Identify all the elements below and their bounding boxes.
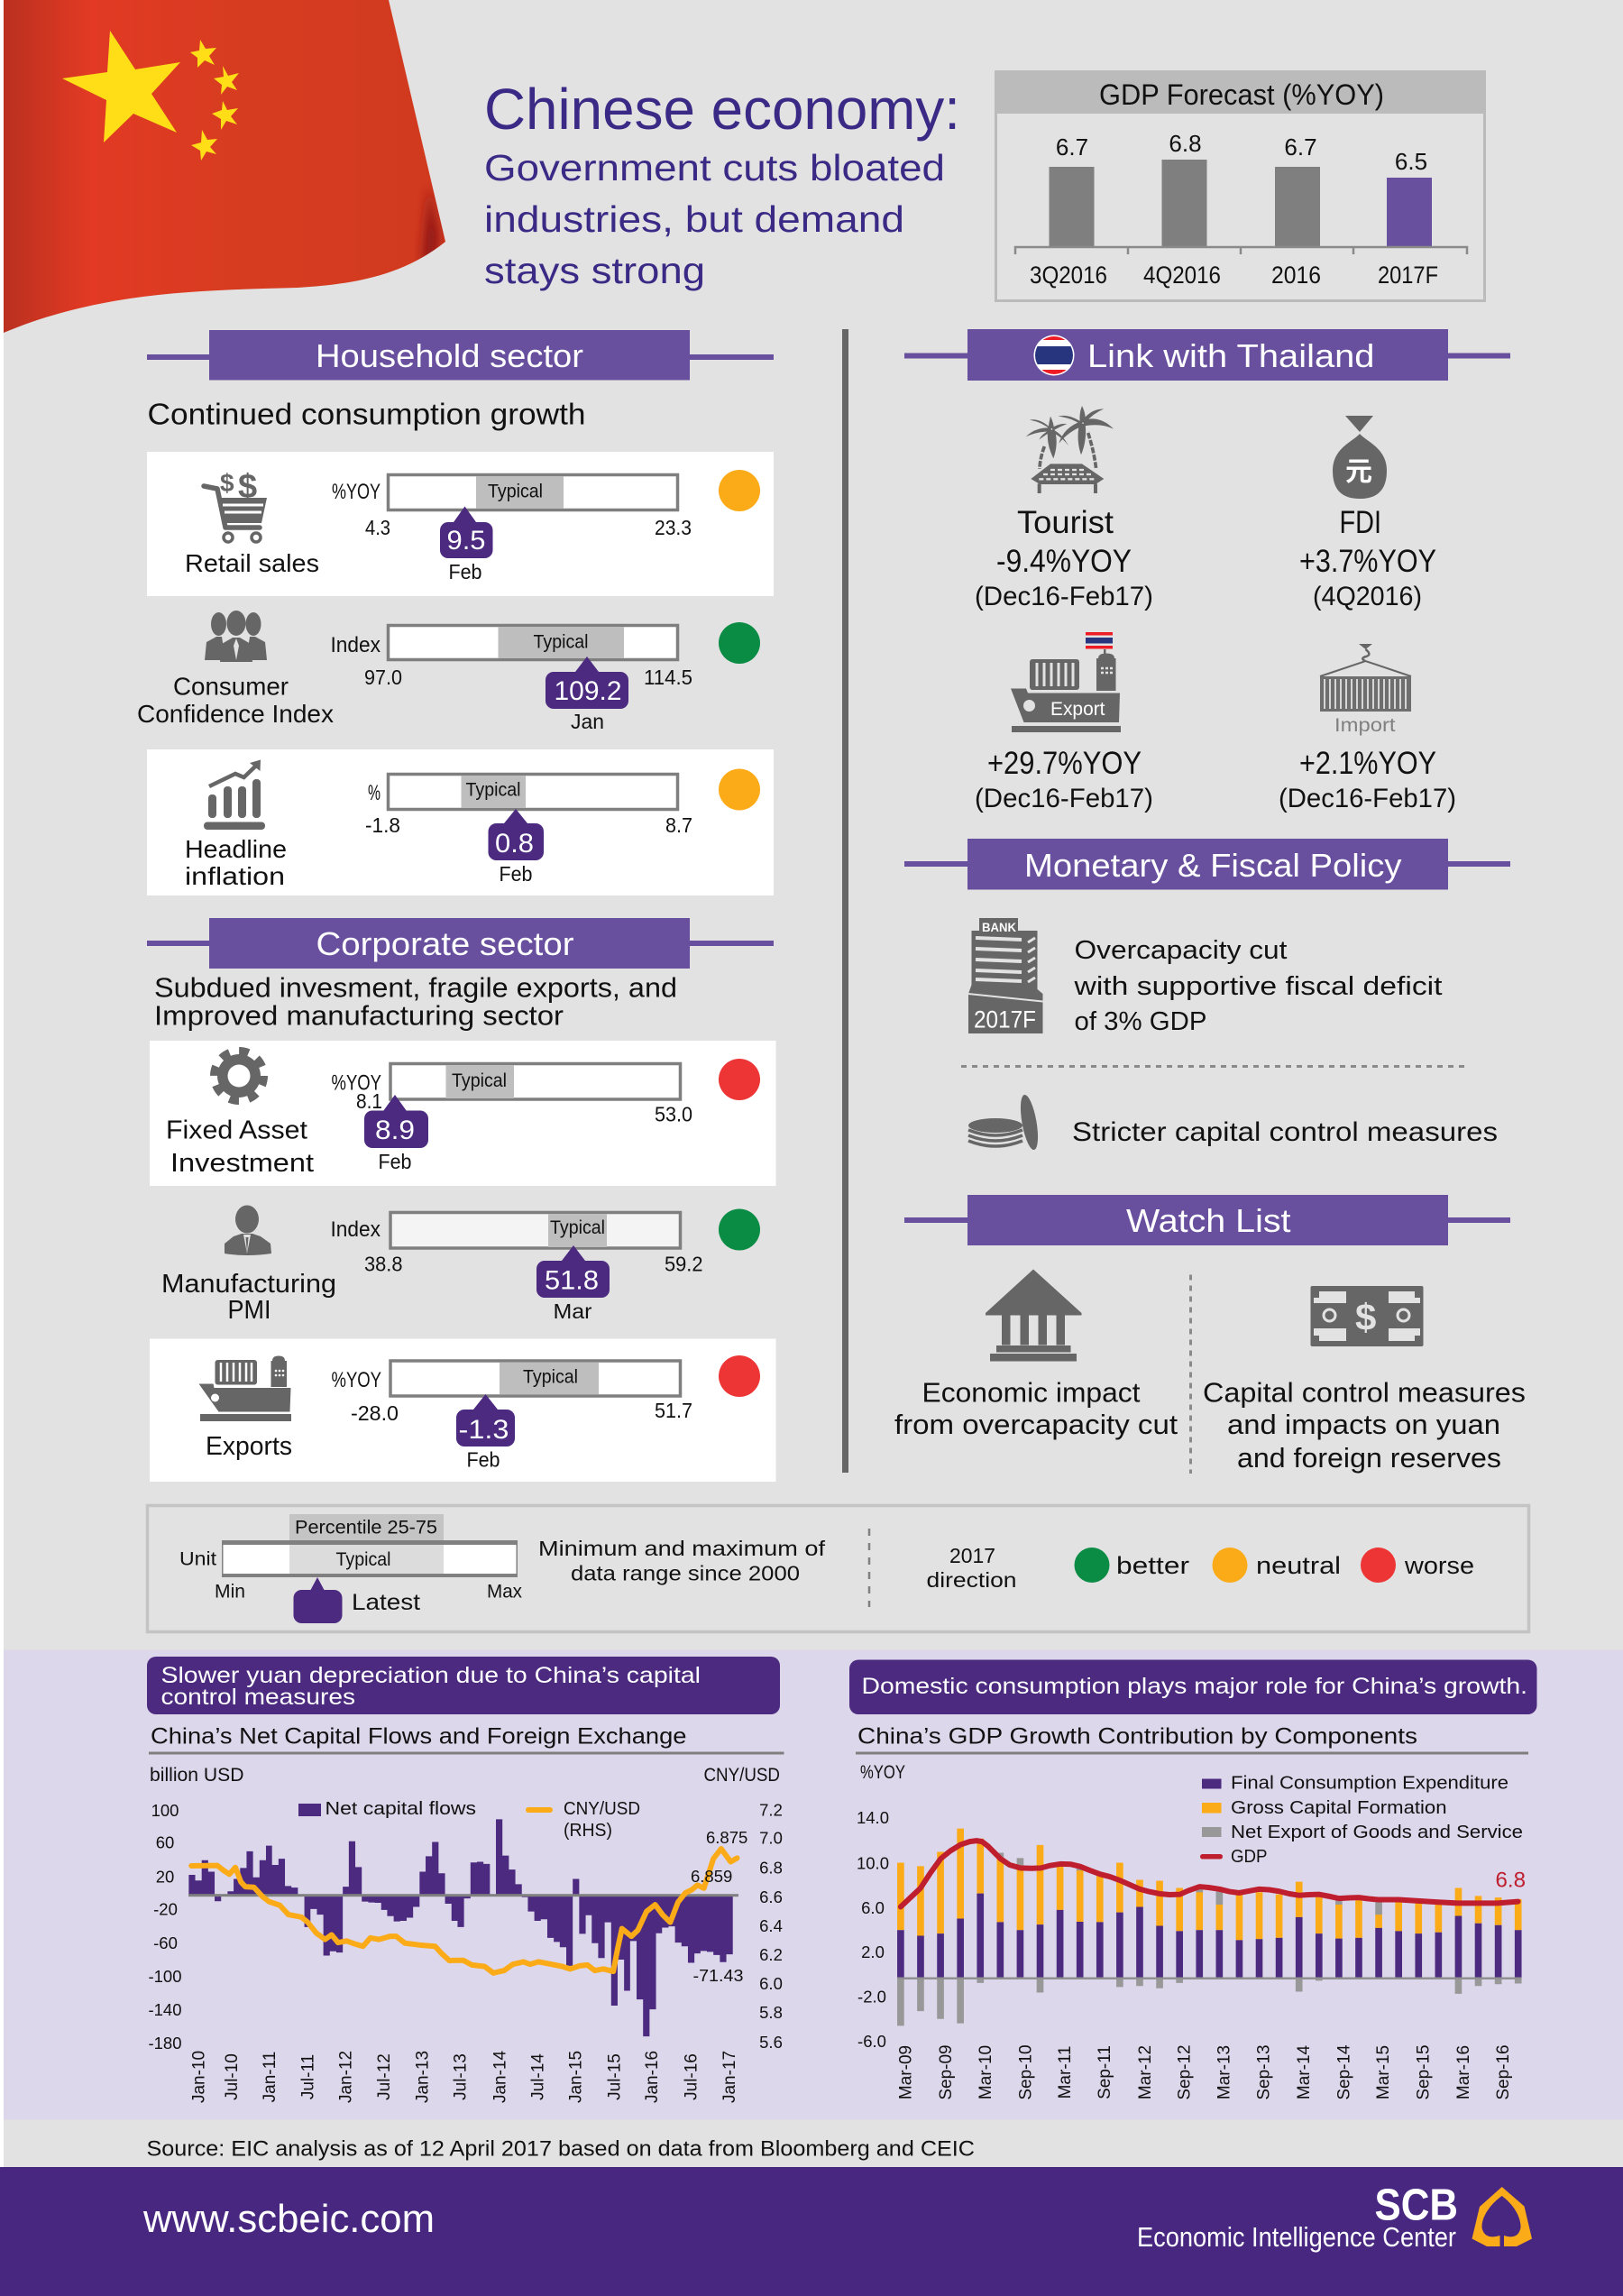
panel: fixed asset investment: Investment (170, 1149, 314, 1178)
latest value marker (536, 1245, 610, 1323)
heading: watch list (904, 1195, 1510, 1245)
x axis labels: Mar-11 (1056, 2046, 1075, 2099)
latest value marker: 109.2 (554, 676, 622, 706)
latest value marker: Feb (449, 560, 481, 583)
x axis labels (896, 2044, 1513, 2100)
latest value marker: -1.3 (458, 1415, 509, 1445)
icon: export ship with Thai flag (1011, 632, 1121, 732)
legend better (1075, 1548, 1189, 1583)
heading: link with Thailand: Link with Thailand (1087, 337, 1374, 374)
x axis labels: Mar-10 (977, 2045, 995, 2099)
subheading: corporate: Improved manufacturing sector (154, 999, 564, 1032)
icon: bank building: BANK (982, 920, 1016, 934)
label: Consumer (173, 673, 289, 700)
left axis: -20 (153, 1899, 178, 1919)
x axis labels: Jul-13 (451, 2053, 471, 2100)
legend: CNY/USD: CNY/USD (564, 1799, 640, 1819)
text: capital control impacts (1203, 1376, 1526, 1474)
left axis (148, 1801, 182, 2053)
legend marker (294, 1577, 420, 1623)
legend: capital flows: Net capital flows (325, 1799, 476, 1819)
x axis labels: Jan-11 (261, 2052, 280, 2102)
x axis labels: Sep-14 (1334, 2044, 1354, 2100)
text: economic impact: Economic impact (922, 1376, 1141, 1409)
range gauge: 23.3 (655, 516, 692, 539)
text: capital control impacts: Capital control measures (1203, 1376, 1526, 1409)
export text: +29.7%YOY (987, 746, 1142, 781)
latest value marker (489, 809, 544, 886)
chart heading: China’s Net Capital Flows and Foreign Exchange (151, 1724, 687, 1750)
chart value labels: 6.875 (706, 1828, 747, 1847)
legend better: better (1116, 1552, 1189, 1579)
heading: household sector: Household sector (316, 337, 583, 374)
latest value marker: 8.9 (375, 1116, 415, 1145)
subtitle: Government cuts bloated (484, 147, 945, 188)
import text: (Dec16-Feb17) (1279, 784, 1456, 813)
legend direction label (927, 1544, 1017, 1592)
right axis: 7.2 (759, 1800, 783, 1820)
chart value labels: -71.43 (692, 1966, 743, 1985)
status dot (719, 622, 760, 664)
latest value marker: 51.8 (545, 1266, 599, 1295)
panel: consumer confidence index: Confidence Index (137, 700, 334, 728)
y axis: -6.0 (857, 2032, 886, 2051)
x axis labels: Jul-15 (606, 2053, 624, 2100)
GDP bar chart: 2017F (1378, 262, 1438, 289)
heading: link with Thailand (904, 329, 1510, 381)
panel: headline inflation: inflation (185, 862, 285, 890)
latest value marker (364, 1095, 428, 1173)
x axis labels: Mar-09 (896, 2045, 916, 2099)
x axis labels: Jan-17 (720, 2051, 739, 2103)
x axis labels (189, 2051, 739, 2103)
text: overcapacity cut: with supportive fiscal deficit (1073, 972, 1443, 1001)
left axis: -140 (148, 2000, 182, 2019)
panel: capital flows chart (147, 1657, 784, 2103)
axis unit: %YOY (860, 1762, 905, 1783)
range gauge: Typical (465, 779, 521, 801)
FDI text: FDI (1340, 505, 1381, 540)
range gauge: 51.7 (655, 1399, 692, 1422)
range gauge: 38.8 (364, 1252, 402, 1275)
x axis labels: Jan-14 (491, 2051, 510, 2103)
range gauge: 4.3 (365, 516, 390, 539)
legend: components (1200, 1773, 1523, 1867)
icon: coins (968, 1094, 1041, 1151)
x axis labels: Jul-10 (223, 2053, 242, 2100)
import text: +2.1%YOY (1299, 746, 1436, 781)
legend: CNY/USD (526, 1799, 640, 1841)
icon: shopping cart: $ (238, 468, 257, 506)
left axis: -100 (148, 1967, 182, 1986)
y axis: 10.0 (857, 1854, 889, 1872)
GDP bar chart: 6.5 (1395, 148, 1427, 175)
x axis labels: Jan-16 (643, 2051, 662, 2103)
label: Manufacturing (161, 1270, 336, 1299)
GDP line (901, 1841, 1518, 1906)
x axis labels: Sep-10 (1017, 2044, 1035, 2100)
latest value marker: Feb (379, 1150, 411, 1173)
left axis: 20 (156, 1867, 174, 1887)
text: economic impact: from overcapacity cut (894, 1409, 1178, 1440)
heading: household sector (147, 330, 774, 381)
range gauge: %YOY (332, 1071, 381, 1095)
GDP bar chart: 3Q2016 (1030, 262, 1107, 289)
import text (1279, 746, 1456, 813)
subtitle: industries, but demand (484, 198, 904, 240)
right axis: 6.8 (759, 1858, 783, 1878)
SCB wordmark: Economic Intelligence Center (1137, 2221, 1456, 2253)
icon: businessman (225, 1205, 271, 1255)
label: Retail sales (185, 549, 319, 577)
icon: money bag: 元 (1345, 457, 1372, 487)
source note: Source: EIC analysis as of 12 April 2017 based on data from Bloomberg and CEIC (146, 2137, 975, 2161)
icon: rising chart (204, 759, 265, 830)
legend: components: Final Consumption Expenditure (1231, 1773, 1508, 1793)
y axis: 14.0 (857, 1808, 889, 1827)
x axis labels: Jan-10 (189, 2051, 209, 2103)
x axis labels: Jan-12 (337, 2051, 355, 2103)
axis units: billion USD (150, 1765, 243, 1786)
range gauge: Typical (488, 482, 543, 501)
heading: monetary and fiscal policy (904, 839, 1510, 889)
FDI text: +3.7%YOY (1299, 544, 1436, 579)
net export bars (897, 1853, 1522, 2025)
icon: hoisted container: Import (1334, 715, 1396, 736)
panel: GDP contribution chart (849, 1659, 1536, 2100)
text: capital control impacts: and foreign reserves (1237, 1442, 1501, 1474)
text: overcapacity cut: Overcapacity cut (1075, 936, 1288, 965)
panel: headline inflation (147, 749, 774, 895)
panel: retail sales (147, 452, 774, 596)
right axis: 6.2 (759, 1945, 783, 1964)
x axis labels: Sep-11 (1096, 2045, 1114, 2099)
legend gauge (179, 1514, 522, 1602)
range gauge: 97.0 (364, 666, 402, 689)
x axis labels: Jan-15 (566, 2051, 586, 2103)
tourist text: (Dec16-Feb17) (975, 582, 1153, 611)
FDI text (1299, 505, 1436, 611)
legend range note: data range since 2000 (571, 1562, 800, 1585)
status dot (719, 1059, 760, 1100)
icon: cargo ship (198, 1356, 291, 1421)
legend: components: Gross Capital Formation (1231, 1798, 1446, 1818)
export text (975, 746, 1153, 813)
vertical divider (842, 329, 848, 1473)
y axis: -2.0 (857, 1988, 886, 2006)
status dot (719, 1355, 760, 1397)
x axis labels: Sep-09 (937, 2044, 956, 2100)
panel: GDP forecast (995, 70, 1486, 301)
x axis labels: Sep-13 (1255, 2044, 1273, 2100)
right axis: 6.0 (759, 1974, 783, 1993)
block: FDI (1299, 416, 1436, 611)
range gauge: -28.0 (351, 1401, 399, 1425)
SCB wordmark: SCB (1374, 2181, 1458, 2229)
heading: monetary and fiscal policy: Monetary & Fiscal Policy (1024, 847, 1401, 884)
range gauge: 8.1 (356, 1089, 382, 1113)
net capital flow bars (188, 1819, 733, 2036)
icon: Thai flag (1033, 335, 1075, 375)
y axis (857, 1808, 889, 2051)
x axis labels: Sep-15 (1414, 2044, 1434, 2100)
tourist text: Tourist (1017, 505, 1114, 540)
legend: components: GDP (1231, 1847, 1268, 1867)
latest value marker: 0.8 (495, 829, 534, 859)
CNY/USD line (191, 1849, 738, 1973)
text: capital control measures: Stricter capital control measures (1072, 1117, 1498, 1147)
callout: yuan depreciation: control measures (160, 1685, 355, 1710)
range gauge: Index (330, 633, 381, 657)
text: overcapacity cut (1073, 936, 1443, 1036)
legend gauge: Min (215, 1582, 245, 1602)
icon: shopping cart (204, 468, 267, 542)
right axis: 7.0 (759, 1829, 783, 1847)
SCB wordmark (1137, 2181, 1458, 2253)
latest value marker: Jan (571, 710, 604, 733)
title: Chinese economy: (484, 77, 960, 142)
text: overcapacity cut: of 3% GDP (1075, 1007, 1206, 1036)
x axis labels: Mar-14 (1295, 2044, 1314, 2099)
label: Fixed Asset (166, 1116, 307, 1145)
latest value marker (546, 657, 628, 733)
panel: charts background (4, 1650, 1623, 2119)
x axis labels: Jul-14 (528, 2053, 548, 2100)
left axis: 60 (156, 1832, 174, 1852)
y axis: 2.0 (861, 1942, 885, 1961)
range gauge: Index (330, 1217, 381, 1242)
x axis labels: Mar-16 (1454, 2045, 1473, 2099)
legend worse (1361, 1548, 1474, 1583)
subheading: corporate: Subdued invesment, fragile exports, and (154, 972, 677, 1003)
x axis labels: Mar-13 (1215, 2045, 1233, 2099)
range gauge: Typical (534, 631, 588, 653)
legend worse: worse (1404, 1552, 1474, 1579)
left axis: -60 (153, 1933, 178, 1952)
status dot (719, 470, 760, 511)
range gauge: 53.0 (655, 1102, 692, 1125)
heading: corporate sector: Corporate sector (316, 925, 574, 962)
text: capital control impacts: and impacts on yuan (1227, 1409, 1500, 1440)
x axis labels: Mar-12 (1136, 2045, 1155, 2099)
axis units: CNY/USD (703, 1765, 780, 1786)
range gauge: %YOY (332, 480, 381, 504)
right axis (759, 1800, 783, 2052)
icon: SCB logo (1472, 2187, 1532, 2246)
GDP bar chart: 2016 (1271, 262, 1321, 289)
left axis: -180 (148, 2034, 182, 2053)
axis units (150, 1765, 780, 1786)
latest value marker (456, 1394, 515, 1472)
x axis labels: Jul-16 (682, 2053, 701, 2100)
heading: corporate sector (147, 918, 774, 969)
icon: bank building: 2017F (974, 1006, 1036, 1033)
range gauge: 59.2 (665, 1252, 703, 1275)
range gauge (332, 1064, 692, 1125)
icon: shopping cart: $ (220, 469, 234, 497)
callout: yuan depreciation (147, 1657, 780, 1714)
chart value labels: 6.859 (691, 1867, 732, 1886)
range gauge: %YOY (332, 1368, 381, 1392)
left axis: 100 (151, 1801, 179, 1820)
panel: manufacturing PMI (161, 1205, 760, 1325)
label: Headline (185, 835, 287, 863)
y axis: 6.0 (861, 1898, 885, 1917)
GDP bar chart: 6.7 (1056, 133, 1088, 161)
x axis labels: Sep-12 (1176, 2044, 1194, 2100)
x axis labels: Jul-11 (299, 2054, 317, 2099)
large star (62, 31, 180, 142)
legend direction label: 2017 (949, 1544, 995, 1567)
icon: hoisted container (1320, 644, 1411, 736)
panel: consumer confidence index (137, 611, 760, 733)
latest value marker (440, 507, 492, 583)
text: economic impact (894, 1376, 1178, 1440)
block: tourist (975, 406, 1153, 611)
chart heading: China’s GDP Growth Contribution by Components (857, 1724, 1417, 1750)
x axis labels: Jan-13 (413, 2051, 433, 2103)
subtitle: stays strong (484, 250, 705, 291)
legend gauge: Unit (179, 1549, 216, 1569)
GDP forecast heading: GDP Forecast (%YOY) (1099, 78, 1384, 111)
icon: banknote (1311, 1286, 1423, 1346)
block: import (1279, 644, 1456, 813)
legend neutral: neutral (1256, 1552, 1341, 1579)
website: www.scbeic.com (142, 2197, 435, 2241)
callout: domestic consumption (849, 1659, 1536, 1714)
legend: CNY/USD: (RHS) (564, 1821, 612, 1841)
label: Exports (206, 1432, 292, 1461)
subheading: household: Continued consumption growth (148, 397, 586, 431)
range gauge: 114.5 (644, 666, 692, 689)
callout: domestic consumption: Domestic consumption plays major role for China’s growth. (862, 1674, 1527, 1699)
panel: fixed asset investment (150, 1041, 775, 1186)
GDP bar chart: 4Q2016 (1143, 262, 1221, 289)
stacked bars (897, 1829, 1522, 2025)
legend range note: Minimum and maximum of (538, 1537, 826, 1560)
chart value labels (691, 1828, 747, 1985)
latest value marker: Mar (554, 1300, 592, 1323)
x axis labels: Sep-16 (1494, 2044, 1513, 2100)
legend range note (538, 1537, 826, 1585)
range gauge: 8.7 (665, 813, 692, 837)
range gauge: Typical (452, 1070, 507, 1091)
GDP bar chart: 6.7 (1284, 133, 1317, 161)
range gauge: Typical (523, 1367, 578, 1387)
panel: exports (150, 1338, 775, 1482)
legend marker: Latest (352, 1590, 420, 1615)
x axis labels: Jul-12 (375, 2053, 394, 2100)
right axis: 6.4 (759, 1916, 783, 1935)
subtitle (484, 147, 945, 291)
icon: export ship with Thai flag: Export (1050, 699, 1105, 720)
GDP latest value: 6.8 (1495, 1869, 1526, 1892)
block: export (975, 632, 1153, 813)
latest value marker: Feb (500, 862, 532, 886)
range gauge: Typical (550, 1217, 605, 1238)
icon: government building (986, 1270, 1082, 1362)
range gauge (332, 474, 692, 539)
range gauge (330, 626, 692, 689)
latest value marker: 9.5 (447, 526, 485, 556)
legend gauge: Typical (335, 1549, 391, 1570)
icon: bank building (968, 918, 1042, 1033)
legend gauge: Max (487, 1582, 522, 1602)
tourist text: -9.4%YOY (996, 544, 1132, 579)
range gauge (332, 1361, 692, 1425)
right axis: 5.8 (759, 2003, 783, 2022)
icon: gear (215, 1052, 263, 1100)
legend direction label: direction (927, 1568, 1017, 1592)
export text: (Dec16-Feb17) (975, 784, 1153, 813)
callout: yuan depreciation: Slower yuan depreciation due to China’s capital (160, 1663, 701, 1688)
status dot (719, 768, 760, 810)
flag of China (4, 0, 445, 333)
x axis labels: Mar-15 (1374, 2045, 1393, 2099)
legend: components: Net Export of Goods and Service (1231, 1823, 1523, 1842)
icon: money bag (1333, 416, 1387, 499)
icon: palms and hammock (1026, 406, 1114, 493)
subheading: corporate (154, 972, 677, 1032)
GDP bar chart: 6.8 (1169, 130, 1202, 157)
heading: watch list: Watch List (1126, 1202, 1291, 1239)
consumption bars (897, 1894, 1522, 1979)
legend neutral (1212, 1548, 1341, 1583)
range gauge (330, 1212, 703, 1275)
tourist text (975, 505, 1153, 611)
range gauge: % (368, 781, 381, 805)
status dot (719, 1208, 760, 1250)
right axis: 5.6 (759, 2033, 783, 2052)
legend gauge: Percentile 25-75 (295, 1517, 437, 1538)
legend panel (148, 1506, 1529, 1632)
footer band (0, 2167, 1623, 2296)
latest value marker: Feb (467, 1448, 500, 1472)
icon: business people (205, 611, 267, 662)
GDP bar chart (1015, 130, 1467, 289)
right axis: 6.6 (759, 1887, 783, 1906)
icon: banknote: $ (1355, 1296, 1376, 1338)
small stars (190, 40, 239, 161)
FDI text: (4Q2016) (1313, 582, 1422, 611)
title (484, 77, 960, 291)
capital formation bars (897, 1829, 1522, 1940)
panel: manufacturing PMI: PMI (227, 1296, 270, 1325)
range gauge (365, 774, 692, 837)
range gauge: -1.8 (365, 813, 400, 837)
